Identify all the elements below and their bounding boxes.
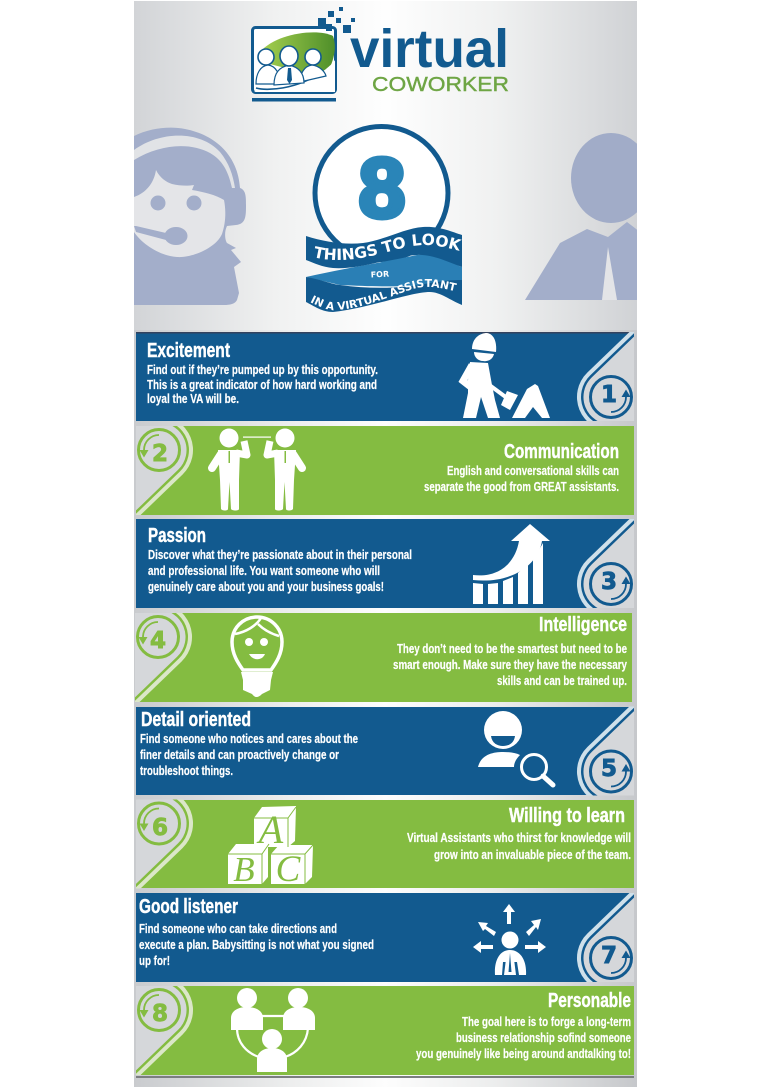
body text: up for! [139, 954, 170, 968]
body text: business relationship sofind someone [456, 1031, 631, 1045]
body text [407, 831, 631, 862]
ribbon bottom [306, 277, 462, 312]
body text: genuinely care about you and your business goals! [148, 580, 384, 594]
number 8: 8 [152, 1001, 168, 1027]
teardrop number 7 [577, 892, 642, 992]
badge: 8 things to look for [306, 124, 462, 312]
body text [140, 732, 358, 778]
badge circle [315, 126, 448, 260]
icon: woman with headset [134, 128, 246, 305]
icon: smiling light bulb [232, 617, 282, 697]
body text: The goal here is to forge a long-term [462, 1015, 631, 1029]
teardrop number 8 [128, 976, 193, 1076]
body text: smart enough. Make sure they have the necessary [393, 658, 627, 672]
icon: growth chart arrow [473, 524, 550, 604]
heading: Personable [548, 990, 631, 1012]
panel: 3 passion [136, 518, 642, 618]
body text: skills and can be trained up. [497, 674, 627, 688]
ribbon subtitle text: IN A VIRTUAL ASSISTANT [310, 279, 457, 310]
teardrop number 3 [577, 518, 642, 618]
number 5: 5 [601, 756, 617, 782]
number 4: 4 [150, 628, 166, 654]
icon: connected people [231, 988, 315, 1072]
icon: person with arrows [473, 904, 546, 975]
panel: 4 intelligence [127, 603, 632, 703]
page background panel [134, 1, 637, 1087]
number 1: 1 [601, 382, 617, 408]
body text: Discover what they’re passionate about in their personal [148, 548, 412, 562]
ribbon top [306, 227, 462, 268]
body text: They don’t need to be the smartest but need to be [397, 642, 627, 656]
heading: Communication [504, 441, 619, 463]
ribbon FOR text: FOR [370, 270, 389, 279]
body text: and professional life. You want someone who will [148, 564, 380, 578]
wordmark: virtual: virtual [350, 19, 509, 79]
header background [134, 1, 637, 330]
ribbon light middle [306, 254, 462, 286]
body text: Find someone who notices and cares about the [140, 732, 358, 746]
number 6: 6 [152, 815, 168, 841]
body text: finer details and can proactively change or [140, 748, 339, 762]
heading: Excitement [147, 340, 230, 362]
body text [148, 548, 412, 594]
panel: 7 good listener [136, 892, 642, 992]
body text: loyal the VA will be. [147, 392, 239, 406]
body text [147, 363, 378, 406]
heading: Detail oriented [141, 709, 251, 731]
body text: grow into an invaluable piece of the team. [434, 848, 631, 862]
icon: ABC blocks: B [233, 850, 255, 889]
heading: Intelligence [539, 614, 627, 636]
heading: Passion [148, 525, 206, 547]
icon: man in suit [525, 133, 637, 300]
icon: worker with shovel [463, 333, 550, 418]
body text: Find someone who can take directions and [139, 922, 337, 936]
heading: Willing to learn [509, 805, 625, 827]
wordmark: coworker: COWORKER [372, 73, 509, 96]
icon: ABC blocks: C [276, 849, 302, 890]
body text [393, 642, 627, 688]
big number 8: 8 [359, 141, 405, 235]
body text: Find out if they’re pumped up by this opportunity. [147, 363, 378, 377]
body text [424, 464, 619, 494]
number 3: 3 [601, 569, 617, 595]
teardrop number 5 [577, 706, 642, 806]
icon: ABC blocks [228, 806, 313, 890]
icon: two men with tin can phone [212, 428, 302, 510]
body text: execute a plan. Babysitting is not what you signed [139, 938, 374, 952]
panel: 8 personable [128, 976, 634, 1076]
body text: you genuinely like being around andtalking to! [416, 1047, 631, 1061]
number 7: 7 [601, 943, 617, 969]
logo: virtual coworker [252, 7, 509, 102]
teardrop number 6 [128, 790, 193, 890]
panel: 2 communication [128, 416, 634, 516]
icon: monitor with team [252, 28, 336, 102]
panel: 6 willing to learn [128, 790, 634, 890]
body text: troubleshoot things. [140, 764, 233, 778]
body text [139, 922, 374, 968]
number 2: 2 [152, 441, 168, 467]
icon: person with magnifier [478, 711, 553, 785]
panel: 5 detail oriented [136, 706, 642, 806]
heading: Good listener [139, 896, 238, 918]
teardrop number 1 [577, 331, 642, 431]
panel: 1 excitement [136, 331, 642, 431]
icon: pixel squares [318, 7, 355, 33]
body text [416, 1015, 631, 1061]
teardrop number 2 [128, 416, 193, 516]
teardrop number 4 [127, 603, 192, 703]
icon: ABC blocks: A [256, 807, 284, 852]
ribbon heading text: THINGS TO LOOK [314, 234, 462, 260]
body text: Virtual Assistants who thirst for knowledge will [407, 831, 631, 845]
body text: English and conversational skills can [447, 464, 619, 478]
body text: separate the good from GREAT assistants. [424, 480, 619, 494]
body text: This is a great indicator of how hard working and [147, 378, 377, 392]
